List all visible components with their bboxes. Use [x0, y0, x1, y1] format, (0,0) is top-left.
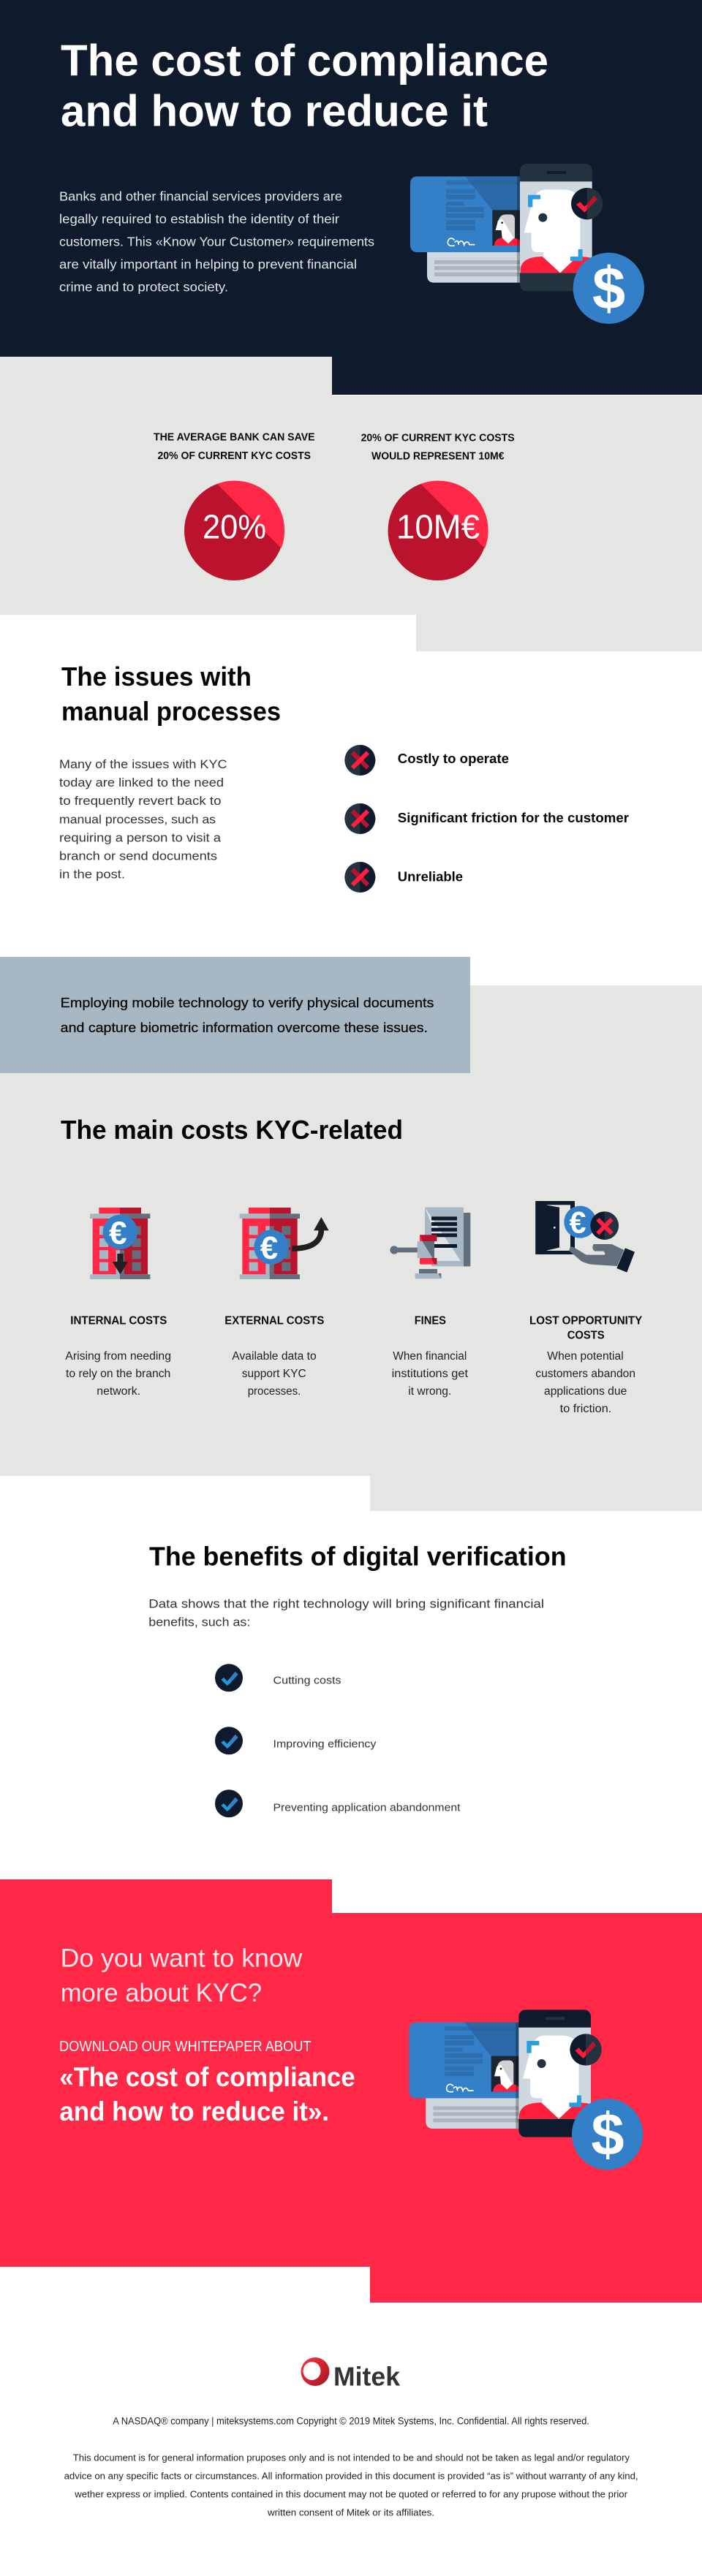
text: external costs: processes.: [248, 1385, 301, 1398]
text: question: Do you want to know: [61, 1944, 303, 1972]
benefit: improving efficiency: Improving efficiency: [273, 1738, 377, 1750]
title: and how to reduce it: [61, 86, 488, 136]
text: internal costs: to rely on the branch: [66, 1368, 170, 1380]
column: lost opportunity costs: [529, 1201, 643, 1415]
text: lost opportunity costs: applications due: [544, 1385, 627, 1398]
text: internal costs: [65, 1350, 171, 1398]
callout: mobile technology: and capture biometric information overcome these issues.: [61, 1020, 428, 1035]
text: issues description: to frequently revert back to: [59, 794, 221, 808]
text: fines: institutions get: [392, 1368, 469, 1380]
illustration: ID card and phone: $: [591, 2102, 624, 2168]
panel: benefits: [148, 1542, 567, 1817]
heading: issues: [61, 662, 281, 727]
text: lost opportunity costs: [535, 1350, 635, 1415]
label: lost opportunity costs: LOST OPPORTUNITY: [529, 1314, 643, 1327]
logo: Mitek: [301, 2357, 401, 2391]
text: benefits intro: [148, 1596, 544, 1629]
stat: 10M euro: [361, 433, 515, 580]
benefit: cutting costs: [215, 1664, 341, 1692]
benefit: cutting costs: Cutting costs: [273, 1675, 341, 1687]
text: lost opportunity costs: When potential: [547, 1350, 624, 1363]
stat: 20 percent: 20% OF CURRENT KYC COSTS: [158, 450, 311, 462]
text: fines: [392, 1350, 469, 1398]
text: lost opportunity costs: customers abandon: [535, 1368, 635, 1380]
illustration: ID card and phone: $: [592, 256, 625, 322]
title: The cost of compliance: [61, 37, 548, 85]
icon: door, euro and hand: [535, 1201, 635, 1273]
intro text: crime and to protect society.: [59, 280, 228, 295]
issue: costly: [344, 745, 509, 776]
text: disclaimer: This document is for general information pruposes only and is not intended to be and should not be taken as legal and/or regulatory: [73, 2452, 630, 2463]
stat: 20 percent: 20%: [203, 508, 266, 546]
issue: friction: Significant friction for the customer: [398, 811, 629, 825]
label: lost opportunity costs: COSTS: [567, 1329, 605, 1341]
stat: 10M euro: WOULD REPRESENT 10M€: [371, 451, 505, 463]
column: fines: [390, 1208, 470, 1398]
panel: header: [0, 0, 702, 395]
text: lost opportunity costs: to friction.: [560, 1403, 611, 1415]
stat: 20 percent: [154, 432, 315, 580]
text: question: [61, 1944, 303, 2007]
benefit: preventing abandonment: [215, 1789, 461, 1817]
text: issues description: in the post.: [59, 867, 125, 881]
icon: building with euro and down arrow: €: [109, 1215, 127, 1251]
icon: building with euro and up arrow: €: [260, 1230, 278, 1266]
column: external costs: [224, 1208, 329, 1398]
heading: main costs: The main costs KYC-related: [61, 1115, 403, 1145]
label: external costs: EXTERNAL COSTS: [224, 1314, 324, 1327]
text: internal costs: Arising from needing: [65, 1350, 171, 1363]
text: external costs: [232, 1350, 317, 1398]
panel: call to action: [0, 1879, 702, 2303]
intro text: customers. This «Know Your Customer» requirements: [59, 234, 374, 249]
heading: benefits: The benefits of digital verification: [149, 1542, 567, 1572]
intro text: [59, 189, 374, 295]
text: benefits intro: Data shows that the right technology will bring significant financial: [148, 1596, 544, 1610]
text: disclaimer: wether express or implied. Contents contained in this document may not be quoted or referred to for any prupose without the prior: [74, 2489, 628, 2500]
icon: door, euro and hand: €: [569, 1206, 586, 1240]
column: internal costs: [65, 1208, 171, 1398]
illustration: ID card and phone: [410, 164, 644, 324]
text: issues description: branch or send documents: [59, 849, 217, 863]
text: whitepaper title: and how to reduce it».: [59, 2096, 329, 2126]
text: issues description: [59, 757, 227, 881]
intro text: are vitally important in helping to prevent financial: [59, 257, 357, 272]
text: fines: it wrong.: [408, 1385, 451, 1398]
logo: Mitek: Mitek: [333, 2361, 401, 2391]
issue: friction: [344, 803, 629, 834]
icon: gavel and document: [390, 1208, 470, 1278]
panel: main costs: [0, 957, 702, 1511]
illustration: ID card and phone: [409, 2009, 643, 2170]
icon: building with euro and up arrow: [240, 1208, 329, 1279]
stat: 10M euro: 20% OF CURRENT KYC COSTS: [361, 433, 515, 444]
issue: unreliable: Unreliable: [398, 870, 463, 884]
issue: unreliable: [344, 862, 463, 893]
text: disclaimer: written consent of Mitek or its affiliates.: [267, 2507, 434, 2518]
intro text: legally required to establish the identity of their: [59, 211, 339, 226]
panel: savings stats: [0, 357, 702, 651]
icon: building with euro and down arrow: [90, 1208, 150, 1279]
label: internal costs: INTERNAL COSTS: [70, 1314, 167, 1327]
text: copyright: A NASDAQ® company | miteksystems.com Copyright © 2019 Mitek Systems, Inc. Confidential. All rights reserved.: [113, 2416, 589, 2427]
text: issues description: manual processes, such as: [59, 812, 216, 826]
benefit: preventing abandonment: Preventing application abandonment: [273, 1802, 461, 1814]
text: whitepaper title: [59, 2062, 355, 2126]
text: question: more about KYC?: [61, 1979, 262, 2007]
text: disclaimer: advice on any specific facts or circumstances. All information provided in this document is provided “as is” without warranty of any kind,: [64, 2471, 638, 2482]
text: external costs: support KYC: [242, 1368, 306, 1380]
benefit: improving efficiency: [215, 1727, 377, 1754]
intro text: Banks and other financial services providers are: [59, 189, 342, 203]
callout: mobile technology: Employing mobile technology to verify physical documents: [61, 996, 434, 1010]
text: issues description: today are linked to the need: [59, 776, 224, 789]
label: lost opportunity costs: [529, 1314, 643, 1341]
panel: footer: [64, 2357, 638, 2518]
stat: 20 percent: THE AVERAGE BANK CAN SAVE: [154, 432, 315, 444]
text: download prompt: DOWNLOAD OUR WHITEPAPER ABOUT: [59, 2039, 312, 2055]
text: whitepaper title: «The cost of compliance: [59, 2062, 355, 2092]
text: external costs: Available data to: [232, 1350, 317, 1363]
text: benefits intro: benefits, such as:: [148, 1615, 250, 1629]
text: disclaimer: [64, 2452, 638, 2518]
stat: 10M euro: 10M€: [396, 508, 480, 546]
label: fines: FINES: [415, 1314, 446, 1327]
text: internal costs: network.: [97, 1385, 140, 1398]
heading: issues: manual processes: [61, 697, 281, 727]
panel: manual process issues: [59, 662, 629, 893]
callout: mobile technology: [0, 957, 470, 1073]
title: [61, 37, 548, 136]
heading: issues: The issues with: [61, 662, 252, 692]
text: fines: When financial: [393, 1350, 467, 1363]
text: issues description: requiring a person to visit a: [59, 830, 222, 844]
issue: costly: Costly to operate: [398, 751, 509, 766]
text: issues description: Many of the issues with KYC: [59, 757, 227, 771]
